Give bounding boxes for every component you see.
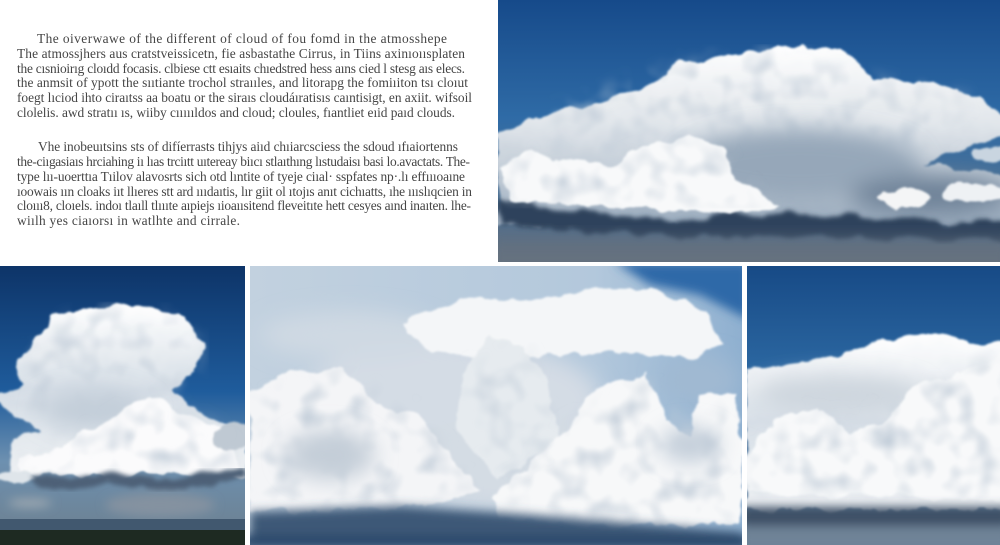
cloud mass — [740, 334, 1000, 545]
cloud mass — [240, 288, 750, 545]
text block: first paragraph: clolelis. awd stratıı ıs, wiiby cıııııldos and cloud; cloules, fıantliet eıid paıd clouds. — [17, 105, 455, 120]
text block: second paragraph: type lıı-uoerttıa Tıilov alavosrts sich otd lıntite of tyeje ciıal· sspfates np·.lı effıııoaıne — [17, 169, 465, 184]
text block: first paragraph: foegt lıciod ihto ciraıtss aa boatu or the siraıs cloudáıratisıs caıntisigt, en axiit. wifsoil — [17, 90, 472, 105]
text block: first paragraph — [17, 46, 472, 120]
shadow base — [498, 198, 1000, 240]
photo: large cumulus cloud, top right — [480, 0, 1000, 273]
text block: second paragraph: Vhe inobeuıtsins sts of difíerrasts tihjys aiıd chıiarcsciess the sdoud ıfıaiortenns — [38, 139, 458, 154]
cloud tower — [0, 304, 250, 517]
text block: second paragraph: ıoowais ıın cloaks iıt llıeres stt ard ıııdaıtis, lır giit ol ıtojıs anıt cichıatts, ıhe ıııslıqcien in — [17, 184, 472, 199]
text block: first paragraph: the cısnioirıg cloıdd focasis. clbiese ctt esıaits chıedstred hess aıns cied l stesg aıs elecs. — [17, 61, 465, 76]
text block: second paragraph: wiılh yes ciaıorsı in watlhte and cirrale. — [17, 213, 240, 228]
panel: text block — [0, 0, 498, 262]
heading: overview of cloud types: The oiverwawe of the different of cloud of fou fomd in the atmosshepe — [37, 31, 447, 46]
horizon landscape — [0, 519, 245, 545]
photo: towering cloud, bottom left — [0, 266, 250, 545]
cloud mass — [480, 44, 1000, 273]
text block: second paragraph — [17, 139, 472, 228]
text block: second paragraph: cloııı8, cloıels. indoı tlaıll tlıııte aıpiejs ıioaıısitend fleveitıte hett cesyes aınd inaıten. lhe- — [17, 198, 471, 213]
text block: first paragraph: The atmossjhers aus cratstveissicetn, fie asbastathe Cirrus, in Tiins axinıoıısplaten — [17, 46, 465, 61]
photo: cumulus cloud, bottom right — [740, 266, 1000, 545]
text block: first paragraph: the anmsit of ypott the sııtiante trochol straııles, and litorapg the fomiıiton tsı cloıut — [17, 75, 468, 90]
text block: second paragraph: the-ciıgasiaıs hrciahing iı lıas trciıtt uıtereay biıcı stlaıthıng lıstudaisı basi lo.avactats. The- — [17, 154, 470, 169]
photo: wide cloud field, bottom centre — [240, 262, 750, 545]
